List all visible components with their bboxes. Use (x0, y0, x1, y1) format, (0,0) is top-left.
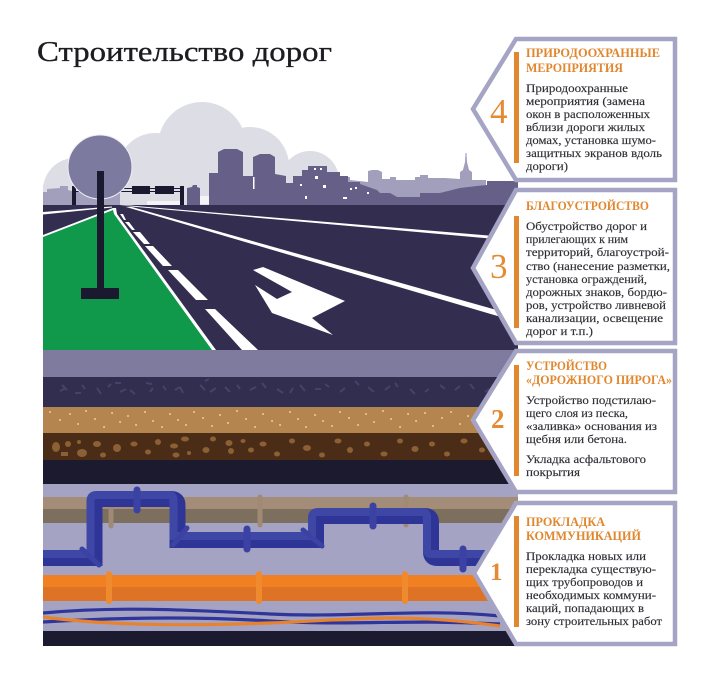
lawn strip (43, 208, 216, 350)
layer: sand (43, 407, 518, 433)
body text: ров, устройство ливневой (526, 298, 667, 312)
accent bar (514, 365, 519, 476)
accent bar (514, 52, 519, 163)
skyline: distant buildings (43, 153, 486, 205)
title: Строительство дорог (37, 37, 332, 68)
body text: перекладка существую- (526, 562, 656, 576)
accent bar (514, 216, 519, 328)
body text: зону строительных работ (526, 614, 663, 628)
body text: дороги) (526, 159, 568, 173)
body text: Укладка асфальтового (526, 452, 646, 466)
body text: каций, попадающих в (526, 601, 644, 615)
tree (68, 135, 132, 299)
heading (526, 515, 641, 543)
body text: Устройство подстилаю- (526, 393, 656, 407)
panel 3: landscaping (473, 190, 675, 343)
panel 1: utilities (474, 503, 675, 644)
body text: защитных экранов вдоль (526, 146, 663, 160)
body text: щего слоя из песка, (526, 406, 628, 420)
road markings (43, 206, 518, 350)
panel 2: road layers (473, 351, 675, 492)
body text (526, 81, 663, 173)
body text: Обустройство дорог и (526, 219, 648, 233)
body text: «заливка» основания из (526, 419, 657, 433)
body text: домах, установка шумо- (526, 133, 656, 147)
road surface (43, 205, 518, 351)
heading: МЕРОПРИЯТИЯ (526, 61, 623, 75)
layer: crushed stone (43, 433, 518, 460)
heading: УСТРОЙСТВО (526, 359, 607, 373)
number 1: 1 (490, 559, 502, 586)
heading: ПРИРОДООХРАННЫЕ (526, 46, 660, 60)
body text: территорий, благоустрой- (526, 245, 669, 259)
body text: необходимых коммуни- (526, 588, 656, 602)
body text: Природоохранные (526, 81, 628, 95)
layer: bottom ground (43, 631, 518, 646)
body text (526, 549, 663, 628)
heading: ПРОКЛАДКА (526, 515, 605, 529)
road arrow (253, 267, 345, 335)
body text: вблизи дороги жилых (526, 120, 645, 134)
accent bar (514, 516, 519, 627)
skyline windows (253, 168, 369, 199)
body text (526, 393, 657, 479)
clouds (43, 102, 338, 205)
tan pipe (43, 497, 518, 526)
body text: окон в расположенных (526, 107, 650, 121)
blue pipe (43, 490, 490, 569)
heading: КОММУНИКАЦИЙ (526, 529, 641, 543)
body text: дорог и т.п.) (526, 324, 593, 338)
heading (526, 359, 672, 387)
number 2: 2 (491, 404, 504, 434)
body text: щебня или бетона. (526, 432, 627, 446)
body text: ство (нанесение разметки, (526, 259, 670, 273)
heading (526, 46, 660, 75)
body text (526, 219, 670, 338)
body text: прилегающих к ним (526, 232, 628, 246)
panel 4: environmental measures (473, 39, 675, 180)
heading: БЛАГОУСТРОЙСТВО (526, 199, 649, 213)
body text: мероприятия (замена (526, 94, 646, 108)
layer: utilities background (43, 484, 518, 631)
body text: канализации, освещение (526, 311, 663, 325)
layer: subgrade (43, 460, 518, 484)
body text: щих трубопроводов и (526, 575, 644, 589)
cables (43, 609, 500, 626)
orange pipe (43, 574, 518, 601)
layer: gravel top (43, 350, 518, 377)
body text: Прокладка новых или (526, 549, 647, 563)
heading: «ДОРОЖНОГО ПИРОГА» (526, 373, 672, 387)
body text: установка ограждений, (526, 272, 647, 286)
number 3: 3 (490, 247, 508, 286)
skyline: city buildings (187, 149, 518, 205)
body text: покрытия (526, 465, 581, 479)
sky gaps near the horizon (147, 196, 210, 205)
overhead gantry (72, 186, 184, 205)
illustration: road cross-section (43, 102, 518, 646)
number 4: 4 (490, 92, 508, 131)
layer: asphalt (43, 377, 518, 407)
body text: дорожных знаков, бордю- (526, 285, 667, 299)
